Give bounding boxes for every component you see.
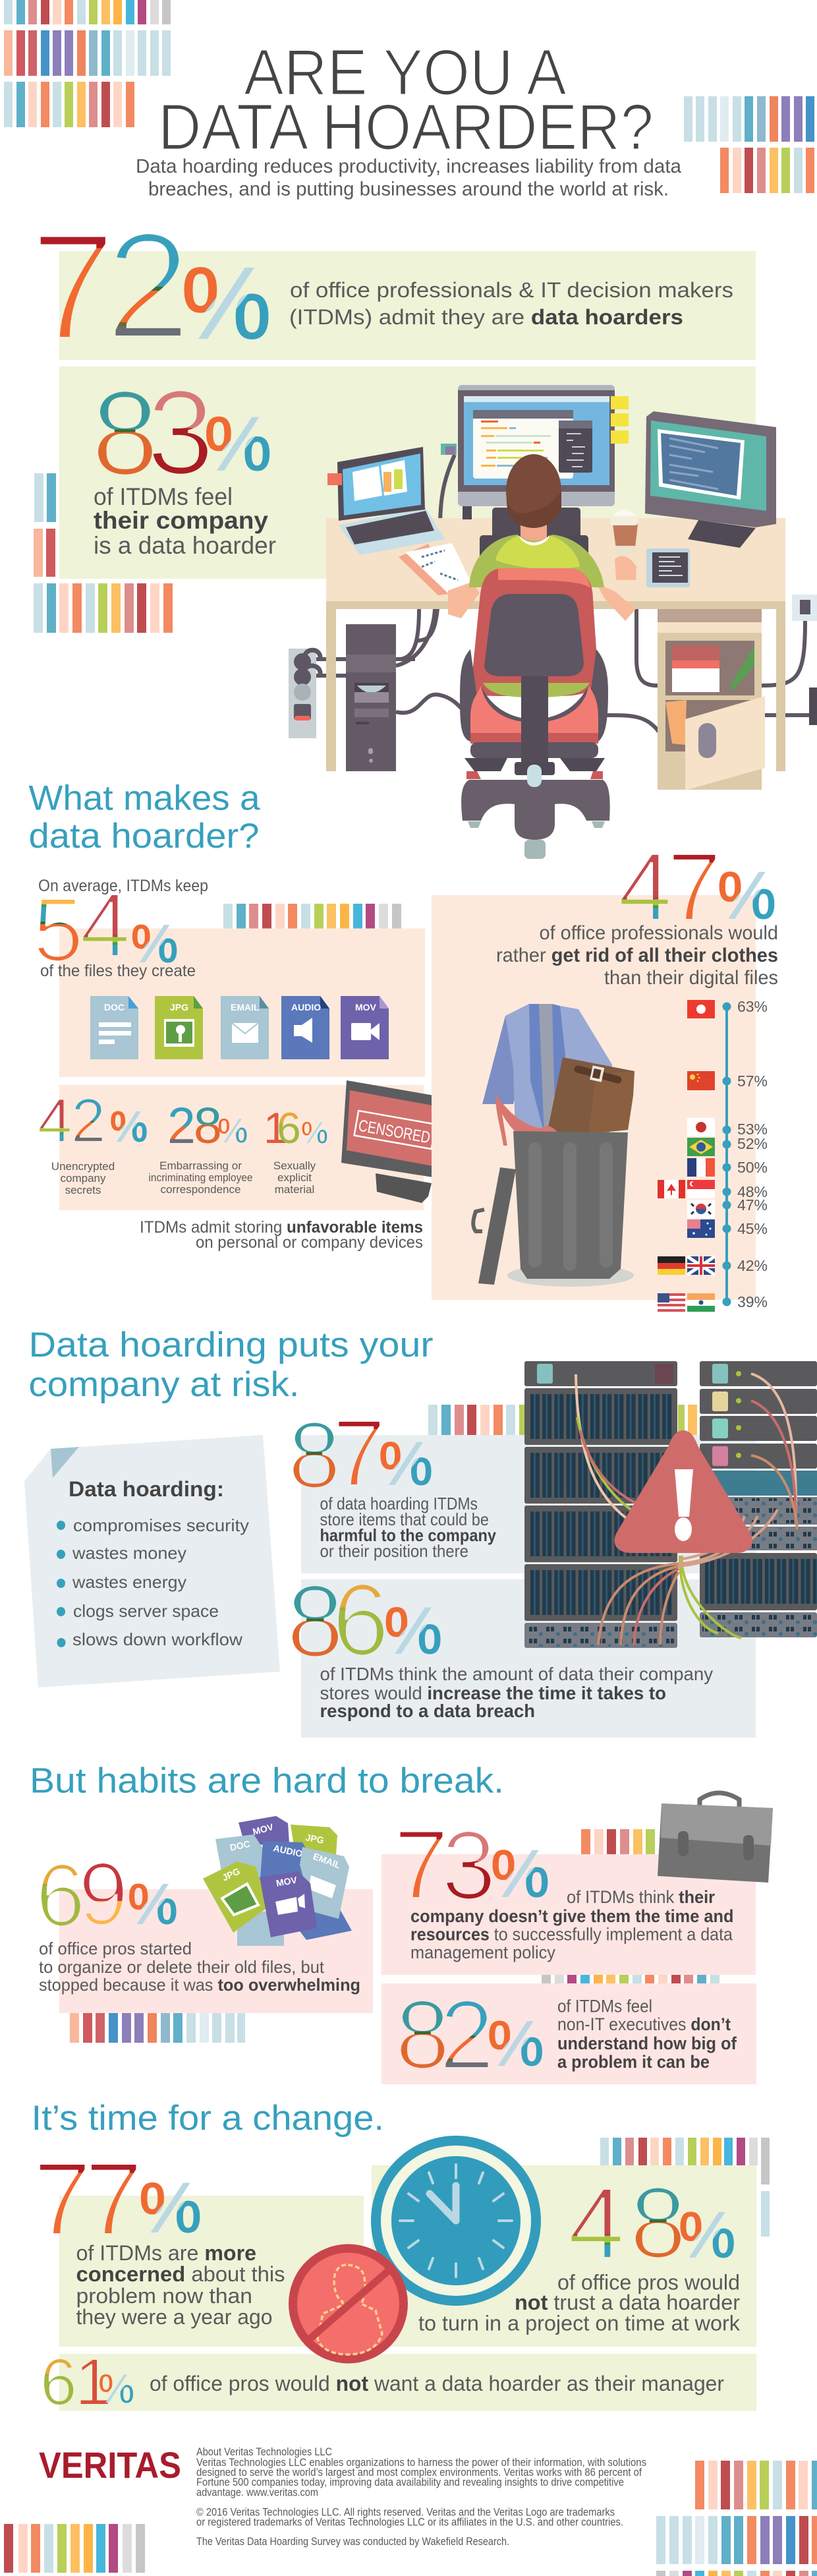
stat: 72% — [31, 201, 271, 371]
stat: 73%: 3 — [441, 1810, 496, 1920]
illustration: pile of files: DOC — [229, 1838, 251, 1853]
stat: 82% — [395, 1979, 544, 2090]
stat: 69%: % — [128, 1873, 178, 1936]
decorative stripes above panel — [223, 904, 401, 929]
text: 87 percent description: store items that could be — [320, 1509, 489, 1529]
stat: 54%: % — [131, 914, 178, 973]
text: unfavorable items caption: on personal or company devices — [196, 1233, 423, 1252]
text: about Veritas — [196, 2445, 646, 2548]
caption: embarrassing correspondence — [149, 1159, 253, 1196]
stat: 47%: 7 — [667, 833, 721, 941]
decorative stripes: bottom left — [4, 2524, 145, 2573]
right monitor — [645, 411, 776, 548]
stat: 87%: 7 — [333, 1400, 385, 1506]
text: 48 percent description: not trust a data hoarder — [515, 2291, 740, 2314]
decorative stripes above 48 percent panel — [600, 2138, 770, 2237]
title: DATA HOARDER? — [158, 91, 654, 163]
icon: clock — [371, 2136, 541, 2306]
stat: 86% — [287, 1563, 442, 1679]
stat: 82%: % — [488, 2008, 544, 2079]
caption: embarrassing correspondence: incriminating employee — [149, 1171, 253, 1184]
coffee cup — [610, 509, 638, 554]
stat: 61%: % — [98, 2366, 134, 2412]
stat: 86%: % — [384, 1594, 442, 1667]
illustration: pile of files: MOV — [275, 1875, 298, 1888]
icon: AUDIO file — [281, 996, 329, 1059]
stat: 87%: 8 — [288, 1402, 341, 1508]
panel: 86 percent — [287, 1563, 756, 1738]
text: 87 percent description: of data hoarding ITDMs — [320, 1494, 478, 1513]
stat: 61% — [40, 2345, 134, 2419]
heading: it's time for a change: It’s time for a change. — [32, 2099, 384, 2138]
decorative stripes: left of desk — [34, 473, 173, 633]
text: 77 percent description: they were a year ago — [76, 2305, 273, 2329]
stat: 72%: 2 — [106, 201, 190, 370]
icon: United Kingdom flag — [687, 1256, 715, 1275]
text: 72 percent description — [289, 278, 733, 329]
illustration: pile of files: EMAIL — [312, 1851, 343, 1871]
center monitor — [441, 385, 629, 519]
stat: 28%: 2 — [167, 1098, 196, 1154]
note card: data hoarding list — [24, 1435, 280, 1687]
stat: 77% — [34, 2142, 202, 2257]
icon: MOV file — [341, 996, 389, 1059]
panel: 61 percent — [40, 2345, 756, 2419]
heading: what makes a data hoarder: What makes a — [29, 779, 260, 817]
panel: files kept — [33, 875, 425, 1077]
stat: 83%: % — [204, 402, 271, 486]
stat: 42%: 4 — [38, 1086, 72, 1155]
decorative stripes: top left — [4, 0, 171, 127]
subtitle — [136, 156, 681, 200]
text: 73 percent description: of ITDMs think their — [567, 1887, 715, 1907]
stat: 42% — [38, 1086, 148, 1155]
text: about Veritas: Veritas Technologies LLC enables organizations to harness the power of their information, with solutions — [196, 2456, 646, 2469]
subtitle: Data hoarding reduces productivity, increases liability from data — [136, 156, 681, 177]
illustration: trash can with clothes — [473, 1004, 634, 1287]
text: 73 percent description: management policy — [410, 1943, 555, 1962]
text: 73 percent description — [410, 1887, 734, 1962]
tower computer — [346, 624, 396, 771]
illustration: pile of files: JPG — [304, 1832, 325, 1846]
warning triangle — [615, 1430, 752, 1553]
stat: 48% — [568, 2166, 735, 2280]
paper on desk — [399, 543, 472, 595]
panel: 87 percent — [288, 1400, 756, 1573]
chart: country timeline axis: 52% — [737, 1135, 768, 1152]
chart: country timeline axis: 57% — [737, 1072, 768, 1090]
panel: 69 percent — [36, 1816, 373, 2013]
cabinet — [658, 609, 765, 790]
panel: 72 percent — [31, 201, 756, 371]
text: 87 percent description — [320, 1494, 496, 1561]
chart: country timeline axis: 42% — [737, 1257, 768, 1274]
stat: 73%: 7 — [394, 1809, 449, 1919]
text: 86 percent description — [320, 1664, 713, 1721]
desk — [326, 518, 785, 771]
text: 61 percent description: of office pros would not want a data hoarder as their manager — [150, 2372, 724, 2395]
heading: what makes a data hoarder — [29, 779, 260, 856]
stat: 82%: 8 — [395, 1979, 450, 2090]
heading: data hoarding puts your company at risk: company at risk. — [29, 1365, 299, 1404]
stat: 16% — [264, 1103, 328, 1152]
icon: JPG file: JPG — [170, 1002, 188, 1012]
stat: 73% — [394, 1809, 549, 1920]
text: on average: On average, ITDMs keep — [38, 877, 208, 895]
decorative stripes: top right — [684, 96, 814, 193]
text: 77 percent description: of ITDMs are more — [76, 2241, 256, 2265]
icon: Singapore flag — [687, 1180, 715, 1198]
decorative stripes under 69 percent panel — [70, 2013, 245, 2043]
caption: unencrypted company secrets: Unencrypted — [51, 1160, 115, 1173]
power strip — [289, 649, 320, 738]
stat: 86%: 6 — [332, 1563, 389, 1678]
stat: 16%: 6 — [277, 1103, 301, 1152]
laptop — [327, 447, 445, 555]
stat: 61%: 6 — [40, 2345, 77, 2419]
stat: 82%: 2 — [439, 1979, 494, 2090]
text: 86 percent description: of ITDMs think the amount of data their company — [320, 1664, 713, 1684]
decorative stripes: bottom right — [656, 2461, 817, 2576]
text: 73 percent description: company doesn’t give them the time and — [410, 1906, 734, 1926]
title: ARE YOU A — [244, 36, 567, 108]
stat: 42%: % — [110, 1103, 148, 1150]
caption: sexually explicit material: explicit — [277, 1171, 312, 1184]
text: 82 percent description: understand how big of — [557, 2034, 737, 2053]
text: 82 percent description: non-IT executives don’t — [557, 2014, 731, 2034]
text: get rid of clothes: than their digital files — [604, 967, 778, 989]
icon: South Korea flag — [687, 1200, 715, 1218]
text: 83 percent description — [94, 483, 276, 559]
text: 87 percent description: harmful to the company — [320, 1525, 496, 1545]
wall outlet and device — [792, 595, 817, 725]
note heading: Data hoarding: — [69, 1477, 224, 1501]
illustration: server racks with warning sign — [524, 1361, 817, 1648]
icon: JPG file — [155, 996, 203, 1059]
text: 77 percent description: problem now than — [76, 2284, 252, 2308]
text: get rid of clothes — [496, 922, 778, 989]
text: 48 percent description — [418, 2270, 741, 2335]
icon: briefcase — [658, 1793, 773, 1883]
text: 82 percent description: a problem it can be — [557, 2052, 710, 2072]
text: 72 percent description: of office professionals & IT decision makers — [290, 278, 733, 302]
text: about Veritas: designed to serve the world’s largest and most complex environments. Veritas works with 86 percent of — [196, 2466, 642, 2478]
text: 86 percent description: respond to a data breach — [320, 1701, 535, 1721]
text: 83 percent description: of ITDMs feel — [94, 483, 233, 510]
icon: MOV file: MOV — [355, 1002, 377, 1012]
caption: unencrypted company secrets: secrets — [65, 1184, 101, 1196]
caption: sexually explicit material — [273, 1159, 316, 1196]
text: 69 percent description — [39, 1939, 360, 1995]
stat: 73%: % — [491, 1837, 549, 1911]
panel: 73 percent — [381, 1793, 773, 1975]
caption: unencrypted company secrets: company — [61, 1172, 106, 1185]
stat: 87% — [288, 1400, 433, 1508]
icon: censored monitor: CENSORED — [357, 1117, 432, 1147]
chart: country timeline axis: 45% — [737, 1220, 768, 1237]
illustration: pile of files: MOV — [252, 1821, 275, 1837]
stat: 28%: % — [217, 1112, 248, 1150]
text: 82 percent description: of ITDMs feel — [557, 1996, 652, 2016]
text: about Veritas: © 2016 Veritas Technologies LLC. All rights reserved. Veritas and the Veritas Logo are trademarks — [196, 2506, 615, 2518]
caption: embarrassing correspondence: correspondence — [161, 1183, 240, 1196]
text: about Veritas: advantage. www.veritas.com — [196, 2486, 318, 2498]
icon: India flag — [687, 1293, 715, 1312]
text: unfavorable items caption: ITDMs admit storing unfavorable items — [140, 1218, 423, 1237]
bullet list: slows down workflow — [72, 1629, 242, 1649]
stat: 28% — [167, 1098, 248, 1154]
icon: no-hoarder sign — [293, 2248, 403, 2359]
icon: AUDIO file: AUDIO — [291, 1002, 321, 1012]
icon: DOC file — [90, 996, 138, 1059]
icon: France flag — [687, 1158, 715, 1177]
stat: 83% — [92, 365, 271, 500]
chart: country timeline axis — [722, 998, 768, 1310]
text: 77 percent description — [76, 2241, 285, 2329]
bullet list: compromises security — [73, 1515, 249, 1535]
icon: DOC file: DOC — [104, 1002, 125, 1012]
panel: 77 percent — [34, 2142, 364, 2347]
text: 48 percent description: to turn in a project on time at work — [418, 2311, 741, 2335]
heading: what makes a data hoarder: data hoarder? — [29, 817, 260, 856]
stat: 61%: 1 — [75, 2345, 112, 2419]
stat: 48%: 8 — [630, 2166, 687, 2279]
chart: country timeline axis: 50% — [737, 1159, 768, 1176]
icon: Hong Kong flag — [687, 1000, 715, 1018]
stat: 47%: 4 — [618, 833, 672, 941]
icon: Canada flag — [658, 1180, 685, 1198]
bullet list: clogs server space — [73, 1601, 219, 1621]
panel: clothes vs digital files — [432, 833, 778, 1312]
bullet list: wastes money — [72, 1543, 186, 1563]
text: of the files they create: of the files they create — [40, 962, 196, 980]
person and chair — [448, 454, 636, 859]
stat: 77%: 7 — [34, 2142, 91, 2257]
panel: unfavorable items — [38, 1080, 453, 1210]
stat: 87%: % — [379, 1430, 433, 1498]
decorative stripes between 73 and 82 panels — [542, 1975, 719, 1983]
text: about Veritas: Fortune 500 companies today, improving data availability and revealing insights to drive competitive — [196, 2476, 624, 2488]
text: 87 percent description: or their position there — [320, 1541, 468, 1561]
text: get rid of clothes: of office professionals would — [539, 922, 778, 944]
text: 69 percent description: to organize or delete their old files, but — [39, 1957, 325, 1977]
bullet list: wastes energy — [72, 1572, 186, 1592]
text: 69 percent description: of office pros started — [39, 1939, 192, 1958]
chart: country timeline axis: 53% — [737, 1121, 768, 1138]
text: 82 percent description — [557, 1996, 737, 2072]
stat: 69%: 6 — [36, 1845, 86, 1945]
icon: Japan flag — [687, 1118, 715, 1136]
stat: 47%: % — [718, 859, 776, 933]
stat: 48%: % — [679, 2199, 735, 2271]
icon: EMAIL file — [221, 996, 269, 1059]
heading: data hoarding puts your company at risk: Data hoarding puts your — [29, 1326, 433, 1364]
text: 72 percent description: (ITDMs) admit they are data hoarders — [289, 305, 683, 329]
text: 83 percent description: their company — [94, 507, 268, 534]
stat: 72%: 7 — [31, 202, 115, 371]
icon: United States flag — [658, 1293, 685, 1312]
tablet — [646, 548, 690, 587]
stat: 72%: % — [181, 247, 271, 360]
stat: 54%: 4 — [80, 875, 130, 976]
chart: country timeline axis: 48% — [737, 1183, 768, 1200]
stat: 77%: 7 — [85, 2142, 142, 2257]
panel: 82 percent — [381, 1979, 756, 2090]
chart: country timeline axis: 47% — [737, 1196, 768, 1214]
icon: China flag — [687, 1071, 715, 1090]
stat: 16%: 1 — [264, 1103, 288, 1152]
chart: country timeline axis: 39% — [737, 1293, 768, 1310]
logo: Veritas: VERITAS — [39, 2444, 181, 2486]
stat: 69%: 9 — [78, 1844, 128, 1944]
left rack — [524, 1361, 677, 1648]
text: 86 percent description: stores would increase the time it takes to — [320, 1683, 666, 1703]
stat: 48%: 4 — [568, 2167, 625, 2280]
icon: EMAIL file: EMAIL — [231, 1002, 260, 1012]
cables — [576, 1374, 797, 1645]
heading: data hoarding puts your company at risk — [29, 1326, 433, 1404]
text: about Veritas: The Veritas Data Hoarding Survey was conducted by Wakefield Research. — [196, 2535, 509, 2548]
text: 83 percent description: is a data hoarder — [94, 532, 276, 559]
panel: 83 percent — [59, 365, 756, 579]
chart: country timeline axis: 63% — [737, 998, 768, 1015]
illustration: person at desk — [289, 385, 817, 859]
caption: sexually explicit material: material — [275, 1183, 314, 1196]
bullet list — [57, 1515, 249, 1649]
stat: 54%: 5 — [33, 879, 84, 981]
text: 69 percent description: stopped because it was too overwhelming — [39, 1975, 360, 1995]
icon: Australia flag — [687, 1219, 715, 1238]
subtitle: breaches, and is putting businesses around the world at risk. — [148, 178, 669, 200]
stat: 42%: 2 — [71, 1086, 105, 1155]
stat: 83%: 8 — [92, 365, 159, 500]
stat: 86%: 8 — [287, 1564, 344, 1679]
text: about Veritas: About Veritas Technologies LLC — [196, 2445, 332, 2458]
stat: 47% — [618, 833, 776, 941]
text: 48 percent description: of office pros would — [557, 2270, 740, 2294]
text: about Veritas: or registered trademarks of Veritas Technologies LLC or its affiliates in the U.S. and other countries. — [196, 2515, 623, 2529]
stat: 77%: % — [139, 2168, 202, 2247]
stat: 28%: 8 — [194, 1098, 222, 1154]
right rack — [700, 1361, 817, 1637]
cables — [316, 455, 817, 732]
icon: censored monitor — [341, 1080, 453, 1203]
text: 73 percent description: resources to successfully implement a data — [410, 1925, 733, 1945]
text: 77 percent description: concerned about this — [76, 2262, 285, 2286]
text: get rid of clothes: rather get rid of all their clothes — [496, 945, 778, 966]
stat: 16%: % — [301, 1115, 328, 1150]
text: unfavorable items caption — [140, 1218, 423, 1252]
illustration: pile of files: JPG — [221, 1865, 242, 1883]
panel: 48 percent — [372, 2165, 756, 2347]
icon: Brazil flag — [687, 1138, 715, 1156]
stat: 54% — [33, 875, 178, 981]
stat: 83%: 3 — [147, 365, 214, 500]
decorative stripes above risk panel — [428, 1405, 697, 1435]
caption: embarrassing correspondence: Embarrassing or — [159, 1159, 242, 1172]
heading: but habits are hard to break: But habits are hard to break. — [30, 1761, 504, 1801]
title — [158, 36, 654, 163]
caption: unencrypted company secrets — [51, 1160, 115, 1196]
icon: Germany flag — [658, 1256, 685, 1275]
illustration: pile of files — [203, 1816, 352, 1946]
stat: 69% — [36, 1844, 178, 1945]
illustration: pile of files: AUDIO — [272, 1842, 304, 1859]
caption: sexually explicit material: Sexually — [273, 1159, 316, 1172]
